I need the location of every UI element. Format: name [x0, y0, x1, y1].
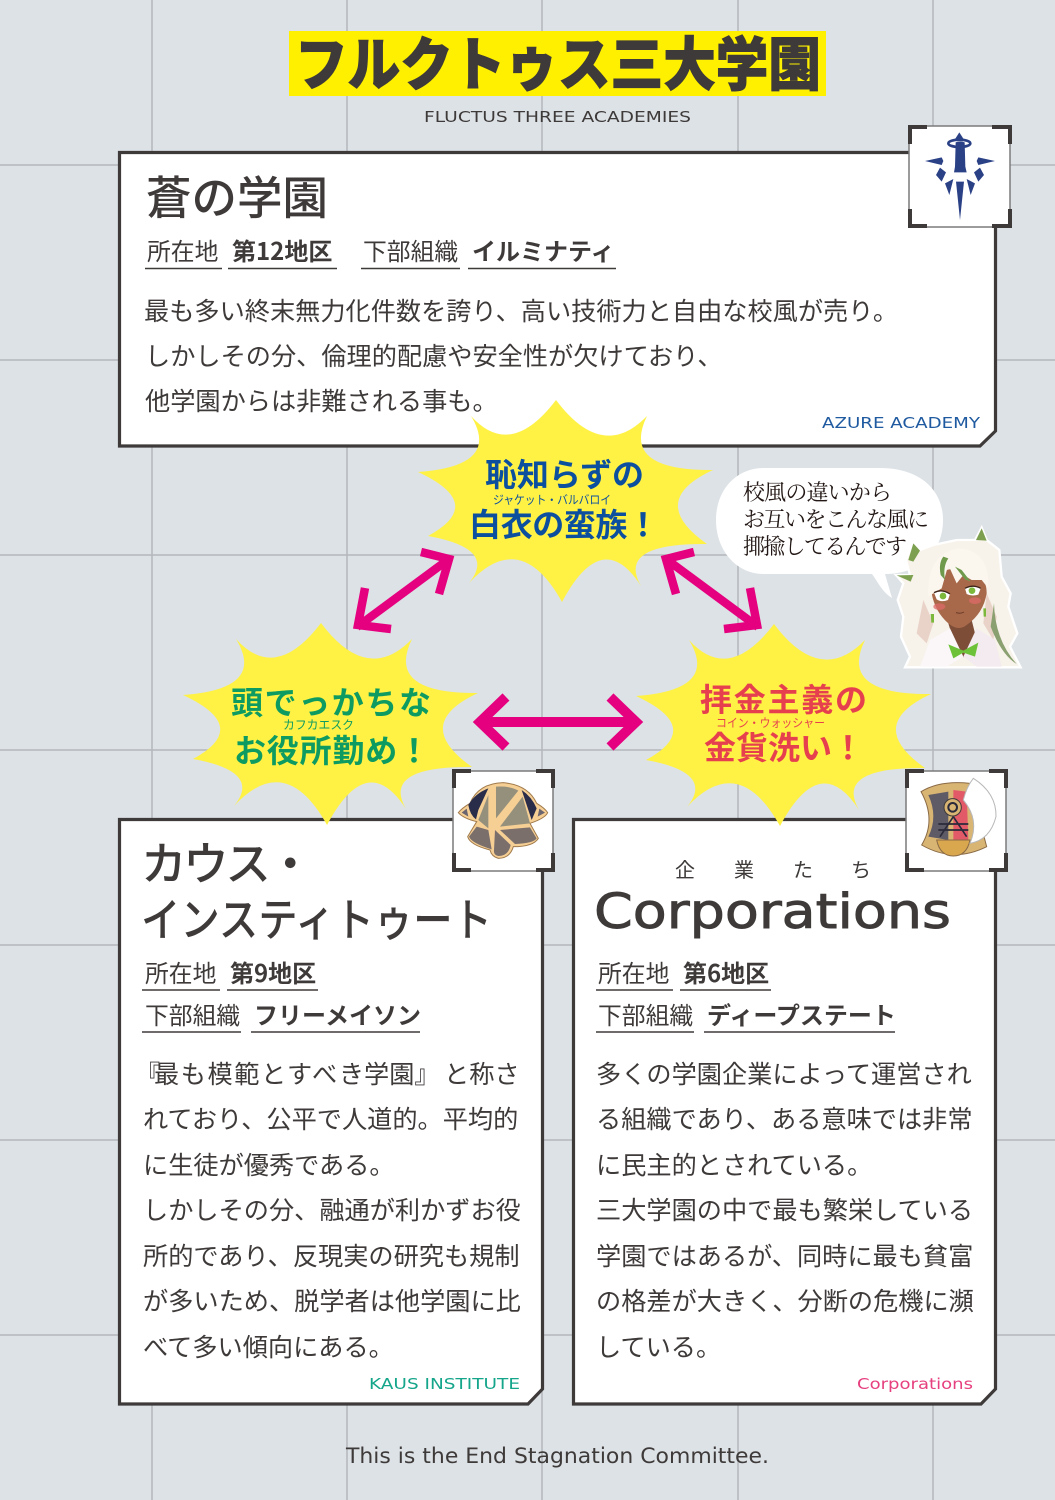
heading: kaus institute: インスティトゥート: [141, 884, 492, 950]
body text: corporations: している。: [596, 1328, 721, 1364]
burst: corporations: コイン・ウォッシャー: [716, 714, 825, 731]
panel: kaus institute: [120, 820, 542, 1404]
body text: corporations: の格差が大きく、分断の危機に瀕: [596, 1282, 974, 1318]
panel tag: corporations: Corporations: [857, 1375, 973, 1393]
speech bubble: お互いをこんな風に: [743, 503, 929, 534]
body text: corporations: [596, 1055, 974, 1364]
heading ruby: corporations: た: [793, 854, 813, 883]
info row: azure academy: 第12地区: [232, 232, 332, 267]
info rows: corporations: 第6地区: [683, 954, 769, 989]
heading ruby: corporations: 企: [675, 854, 695, 883]
info rows: corporations: 所在地: [598, 954, 669, 989]
body text: kaus institute: [135, 1055, 521, 1364]
info rows: kaus institute: フリーメイソン: [254, 996, 421, 1031]
speech bubble: 揶揄してるんです: [743, 530, 907, 561]
burst: azure: 白衣の蛮族！: [469, 500, 659, 546]
heading: azure academy: 蒼の学園: [146, 162, 328, 228]
info row: azure academy: 下部組織: [363, 232, 458, 267]
burst: corporations: [636, 624, 931, 826]
body text: azure academy: 最も多い終末無力化件数を誇り、高い技術力と自由な校風が売り。: [144, 292, 898, 328]
heading: kaus institute: カウス・: [141, 828, 313, 894]
burst: kaus: 頭でっかちな: [231, 678, 431, 724]
heading ruby: corporations: 業: [734, 854, 754, 883]
heading: corporations: Corporations: [594, 884, 951, 940]
burst: kaus: [183, 623, 478, 825]
panel: corporations: [574, 820, 996, 1404]
speech bubble: 校風の違いから: [743, 476, 892, 507]
badge: azure academy emblem: [909, 126, 1010, 227]
body text: kaus institute: 最も模範とすべき: [154, 1055, 364, 1091]
panel tag: kaus institute: KAUS INSTITUTE: [369, 1375, 520, 1393]
heading ruby: corporations: ち: [851, 854, 871, 883]
info row: azure academy: イルミナティ: [472, 232, 615, 267]
body text: kaus institute: れており、公平で人道的。平均的: [143, 1100, 518, 1136]
badge: corporations emblem: [906, 771, 1006, 871]
body text: kaus institute: と称さ: [444, 1055, 520, 1091]
character illustration: [896, 528, 1021, 667]
body text: kaus institute: に生徒が優秀である。: [143, 1146, 395, 1182]
body text: kaus institute: べて多い傾向にある。: [143, 1328, 394, 1364]
info rows: kaus institute: 第9地区: [230, 954, 316, 989]
body text: corporations: 多くの学園企業によって運営され: [596, 1055, 972, 1091]
info row: azure academy: 所在地: [147, 232, 218, 267]
arrow: kaus to corporations: [480, 697, 636, 747]
body text: azure academy: 他学園からは非難される事も。: [145, 382, 498, 418]
burst: azure: ジャケット・バルバロイ: [493, 491, 611, 508]
info row: azure academy: [145, 232, 616, 268]
body text: azure academy: しかしその分、倫理的配慮や安全性が欠けており、: [145, 337, 723, 373]
body text: kaus institute: 所的であり、反現実の研究も規制: [143, 1237, 520, 1273]
body text: kaus institute: 学園』: [364, 1055, 440, 1091]
info rows: kaus institute: 所在地: [145, 954, 216, 989]
burst: azure: [418, 400, 713, 602]
arrow: azure to kaus: [357, 552, 449, 629]
body text: kaus institute: 『: [135, 1055, 160, 1091]
title: フルクトゥス三大学園: [295, 18, 821, 102]
info rows: kaus institute: 下部組織: [145, 996, 240, 1031]
panel: azure academy: [120, 152, 996, 446]
arrow: azure to corporations: [666, 552, 758, 629]
panel tag: azure academy: AZURE ACADEMY: [822, 414, 981, 432]
burst: kaus: お役所勤め！: [234, 726, 430, 772]
info rows: corporations: 下部組織: [598, 996, 693, 1031]
badge: kaus institute emblem: [453, 771, 553, 871]
burst: corporations: 金貨洗い！: [704, 723, 864, 769]
body text: corporations: 学園ではあるが、同時に最も貧富: [596, 1237, 973, 1273]
body text: azure academy: [144, 292, 898, 418]
subtitle: FLUCTUS THREE ACADEMIES: [424, 108, 691, 126]
burst: kaus: カフカエスク: [283, 716, 354, 733]
body text: kaus institute: しかしその分、融通が利かずお役: [143, 1191, 521, 1227]
speech bubble: [716, 468, 943, 598]
heading ruby: corporations: [675, 854, 871, 883]
info rows: corporations: [596, 954, 896, 1032]
body text: corporations: 三大学園の中で最も繁栄している: [596, 1191, 973, 1227]
info rows: kaus institute: [142, 954, 421, 1032]
burst: corporations: 拝金主義の: [700, 675, 867, 721]
body text: corporations: る組織であり、ある意味では非常: [596, 1100, 973, 1136]
heading: kaus institute: [141, 828, 492, 950]
footer: This is the End Stagnation Committee.: [345, 1444, 769, 1468]
burst: azure: 恥知らずの: [485, 450, 644, 496]
info rows: corporations: ディープステート: [707, 996, 896, 1031]
body text: kaus institute: が多いため、脱学者は他学園に比: [143, 1282, 521, 1318]
body text: corporations: に民主的とされている。: [596, 1146, 872, 1182]
